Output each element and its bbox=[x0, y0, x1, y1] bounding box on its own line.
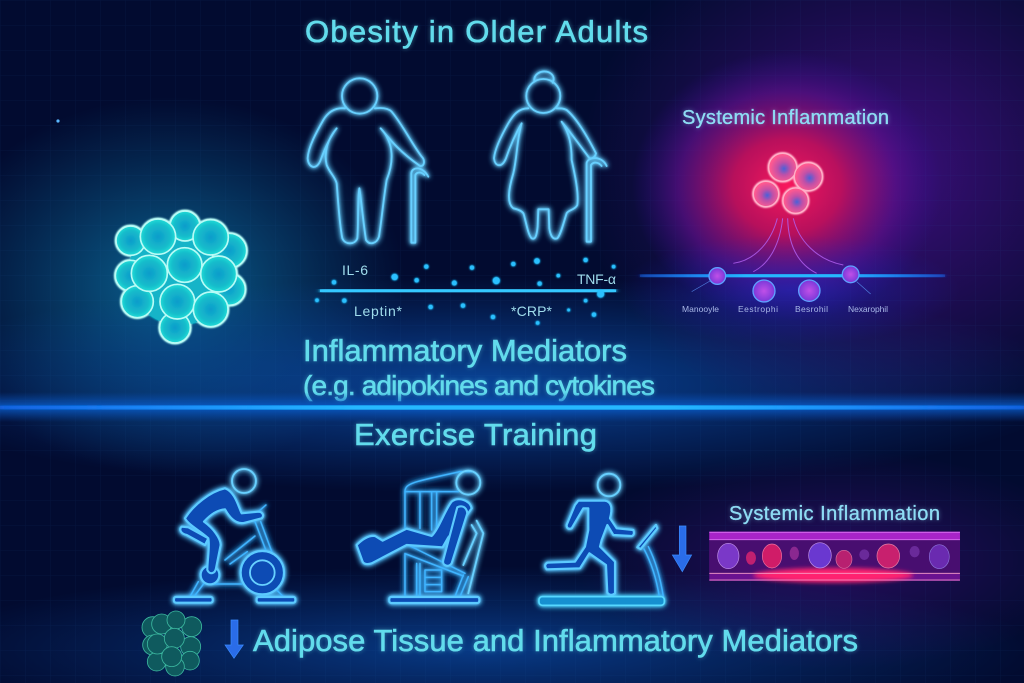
red glow bbox=[632, 51, 942, 321]
mediator labels: TNF-α bbox=[577, 271, 616, 287]
blood vessel bbox=[709, 532, 960, 583]
panel: systemic inflammation (lower) bbox=[709, 503, 960, 583]
heading: Systemic Inflammation bbox=[729, 503, 940, 525]
immune cells bbox=[692, 266, 871, 302]
blood cells bbox=[718, 543, 949, 569]
arrow: down toward inflammation bbox=[672, 526, 692, 572]
inflammatory mediators particles bbox=[315, 258, 616, 325]
icon: reduced adipose cluster bbox=[142, 611, 202, 676]
mediator dots bbox=[315, 258, 615, 325]
cell labels: Besrohil bbox=[795, 304, 828, 314]
inflamed cell cluster bbox=[753, 153, 822, 213]
mediator labels: Leptin* bbox=[354, 303, 403, 319]
migration curves bbox=[733, 218, 843, 273]
mediator baseline bbox=[320, 290, 616, 292]
cell labels bbox=[682, 304, 888, 314]
cell labels: Manooyle bbox=[682, 304, 719, 314]
icon: runner on treadmill bbox=[539, 474, 664, 605]
mediator labels bbox=[342, 262, 616, 319]
heading: inflammatory mediators bbox=[303, 333, 655, 401]
icon: adipose tissue cluster bbox=[115, 211, 247, 343]
icon: leg press machine bbox=[357, 471, 483, 603]
panel: systemic inflammation (upper) bbox=[620, 51, 960, 345]
cell labels: Eestrophi bbox=[738, 304, 778, 314]
mediator labels: IL-6 bbox=[342, 262, 368, 278]
vessel line bbox=[640, 274, 945, 277]
heading: inflammatory mediators: Inflammatory Mediators bbox=[303, 333, 627, 368]
heading: Systemic Inflammation bbox=[682, 107, 889, 129]
icon: cyclist on stationary bike bbox=[174, 469, 295, 603]
heading: exercise training: Exercise Training bbox=[354, 417, 597, 452]
heading: inflammatory mediators: (e.g. adipokines and cytokines bbox=[303, 370, 655, 401]
title: Obesity in Older Adults bbox=[305, 14, 648, 49]
icon: older woman with cane bbox=[494, 71, 607, 242]
cell labels: Nexarophil bbox=[848, 304, 888, 314]
heading: adipose tissue and inflammatory mediators: Adipose Tissue and Inflammatory Mediators bbox=[253, 623, 858, 658]
mediator labels: *CRP* bbox=[511, 303, 553, 319]
arrow: down toward adipose text bbox=[225, 620, 243, 658]
divider bbox=[0, 392, 1024, 422]
blue band under cells bbox=[620, 235, 960, 345]
icon: older man with cane bbox=[308, 78, 428, 243]
